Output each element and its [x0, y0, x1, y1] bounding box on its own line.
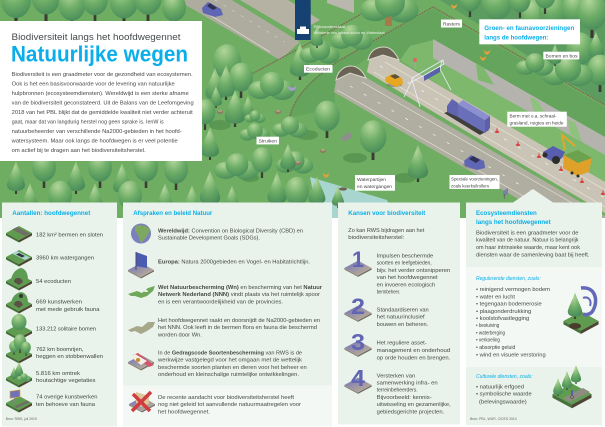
list: culturele diensten: • natuurlijk erfgoed: [476, 385, 524, 391]
label: Speciale voorzieningen: zoals keerkuilrollers: [451, 183, 490, 188]
intro text: Ook is het een basisvoorwaarde voor de levering van natuurlijke: [12, 82, 175, 88]
text: Wet Natuurbescherming: en is een verantwoordelijkheid van de provincies.: [158, 299, 283, 305]
item 4: Bijvoorbeeld: kennis-: [377, 395, 432, 401]
list: regulerende diensten: • waterberging: [476, 330, 505, 336]
list: regulerende diensten: • tegengaan bodemerosie: [476, 302, 542, 308]
label: Speciale voorzieningen: Speciale voorzieningen,: [451, 176, 498, 182]
icon: gedragscode: [128, 353, 154, 370]
text: [36, 347, 103, 360]
label: Speciale voorzieningen: [450, 175, 500, 189]
intro text: natuurbeheerder van verschillende Na2000-gebieden in het hoofd-: [12, 129, 182, 135]
item 3: management en onderhoud: [377, 348, 450, 354]
grass verge with wall: [400, 39, 605, 190]
intro text: van de biodiversiteit geconstateerd. Uit de Balans van de Leefomgeving: [12, 100, 194, 106]
logo: Rijkswaterstaat: [295, 0, 385, 40]
intro: [476, 231, 590, 258]
text: houtachtige vegetaties: [36, 378, 96, 384]
heading: langs het hoofdwegennet: [476, 219, 551, 226]
icon: number 2: [344, 294, 372, 322]
list: culturele diensten: • symbolische waarde: [476, 392, 532, 398]
list: culturele diensten: [476, 385, 532, 405]
callout: Groen- en faunavoorzieningen: [479, 19, 580, 44]
item 2: bouwen en beheren.: [377, 322, 428, 328]
intro text: 2018 van het PBL blijkt dat de gemiddelde kwaliteit niet verder achteruit: [12, 110, 193, 116]
icon: number 1: [344, 247, 372, 277]
label: Waterpartijen: en watergangen: [357, 184, 393, 189]
intro: [348, 228, 425, 241]
text: Gedragscode: [158, 350, 307, 378]
label: Rasters: [441, 20, 462, 28]
list: culturele diensten: (belevingswaarde): [479, 399, 527, 405]
label: Waterpartijen: Waterpartijen: [357, 177, 387, 182]
heading: Aantallen: hoofdwegennet: [12, 210, 90, 217]
water: [310, 177, 395, 218]
source: Bron: RWS, juli 2019: [6, 417, 37, 421]
label: Ecoducten: [304, 65, 332, 73]
item 3: Het reguliere asset-: [377, 341, 427, 347]
road top left: [177, 0, 320, 60]
intro: Biodiversiteit is een graadmeter voor de: [476, 231, 579, 237]
item 1: [377, 254, 450, 296]
logo: Rijkswaterstaat: Rijkswaterstaat: [314, 25, 346, 29]
text: hoofdwegennet raakt: Het hoofdwegennet raakt en doorsnijdt de Na2000-gebieden en: [158, 318, 320, 324]
icon: red cross: [129, 392, 155, 412]
item 1: Impulsen beschermde: [377, 254, 433, 260]
tree shadows: [209, 120, 416, 183]
icon: number 2: 2: [351, 294, 365, 319]
icon: bermen en sloten: [6, 226, 32, 242]
item 2: Standaardiseren van: [377, 307, 429, 313]
subheading: Culturele diensten: Culturele diensten, zoals:: [476, 374, 533, 380]
icon: number 4: 4: [351, 365, 365, 391]
item 4: Versterken van: [377, 373, 415, 379]
road 2 (upper): [367, 47, 605, 213]
text: 3960 km watergangen: [36, 256, 94, 262]
item 1: bijv. het verder ontsnipperen: [377, 268, 450, 274]
text: Gedragscode: werkwijze vastgelegd voor het omgaan met de wettelijk: [158, 358, 302, 364]
label: Berm met: grasland, ruigtes en heide: [510, 120, 564, 126]
heading: Afspraken en beleid Natuur: [133, 210, 213, 217]
text: 133.212 solitaire bomen: [36, 326, 96, 332]
icon: number 3: [344, 329, 372, 357]
roller sign: [503, 188, 508, 199]
icon: overige kunstwerken: [6, 390, 32, 412]
intro: biodiversiteitsherstel:: [348, 235, 404, 241]
intro text: Biodiversiteit is een graadmeter voor de gezondheid van ecosystemen.: [12, 72, 193, 78]
ecoduct green: [250, 3, 605, 190]
list: regulerende diensten: • wind en visuele verstoring: [476, 352, 546, 358]
list: regulerende diensten: • verkoeling: [476, 338, 500, 344]
text: Wereldwijd: Wereldwijd: Convention on Biological Diversity (CBD) en: [158, 228, 303, 234]
text: 182 km² bermen en sloten: [36, 232, 103, 238]
trees centre: [194, 0, 428, 214]
intro: kwaliteit van de natuur. Natuur is belangrijk: [476, 238, 579, 244]
text: recente aandacht: het hoofdwegennet.: [158, 409, 210, 415]
icon: tree with cycle: [563, 288, 599, 334]
trees below title card: [7, 153, 201, 218]
panel: Afspraken en beleid: [123, 202, 332, 426]
trees top right: [460, 0, 605, 92]
label: Bomen en bos: Bomen en bos: [546, 54, 578, 58]
list: regulerende diensten: • koolstofvastlegging: [476, 316, 529, 322]
text: hoofdwegennet raakt: het NNN. Ook leeft in de bermen flora en fauna die beschermd: [158, 325, 317, 331]
stumps: [217, 110, 326, 165]
text: 54 ecoducten: [36, 279, 71, 285]
text: hoofdwegennet raakt: [158, 318, 320, 338]
item 4: uitwisseling en gezamenlijke,: [377, 402, 451, 408]
text: hoofdwegennet raakt: worden door Wn.: [158, 332, 202, 338]
intro: om haar intrinsieke waarde, maar kent ook: [476, 245, 580, 251]
heading: Ecosysteemdiensten: [476, 210, 537, 217]
label: Struiken: Struiken: [258, 138, 278, 144]
item 1: bermbeheer.: [377, 290, 400, 296]
list: regulerende diensten: • bestuiving: [476, 323, 499, 329]
road 1 (lower): [334, 66, 605, 219]
item 3: [377, 341, 450, 361]
label: Struiken: [256, 137, 279, 144]
item 4: gebiedsgerichte projecten.: [377, 409, 444, 415]
sign road: [413, 58, 417, 69]
panel: Aantallen: [2, 202, 117, 426]
text: heggen en stobbenwallen: [36, 354, 103, 360]
text: Wet Natuurbescherming: Wet Natuurbescherming (Wn) en bescherming van het Natuur: [158, 285, 322, 291]
list: regulerende diensten: [476, 287, 550, 358]
intro text: watersysteem. Maar ook langs de hoofdwegen is er veel potentie: [11, 138, 178, 144]
yellow car: [385, 74, 403, 87]
icon: NL map green: [128, 286, 155, 298]
item 2: [377, 307, 429, 328]
white lower background: [0, 218, 605, 427]
text: 669 kunstwerken: [36, 300, 82, 306]
intro: diensten waar de samenleving baat bij heeft.: [476, 252, 590, 258]
item 4: [377, 373, 451, 415]
icon: ecoducten: [6, 268, 32, 290]
callout: Groen- en faunavoorzieningen: Groen- en faunavoorzieningen: [484, 25, 574, 32]
item 1: soorten en leefgebieden,: [377, 261, 432, 267]
top car: [202, 2, 223, 17]
item 1: van het hoofdwegennet: [377, 275, 438, 281]
text: [36, 371, 96, 384]
text: Gedragscode: In de Gedragscode Soortenbescherming van RWS is de: [158, 350, 302, 356]
icon: trees with cyclist: [552, 365, 592, 408]
traffic cones: [495, 127, 605, 195]
text: Europa: Europa: Natura 2000gebieden en Vogel- en Habitatrichtlijn.: [158, 260, 310, 266]
forest background top right: [440, 0, 605, 105]
icon: boomrijen: [6, 334, 32, 364]
panel: Kansen voor biodiversiteit: [338, 202, 460, 424]
heading: [476, 210, 551, 226]
item 2: het natuurinclusief: [377, 315, 425, 321]
gantry: [404, 60, 451, 107]
icon: houtachtige vegetaties: [6, 362, 32, 388]
text: Gedragscode: onderhoud en kleinschalige ruimtelijke ontwikkelingen.: [158, 372, 299, 378]
source: Bron: PBL, WUR, CICES 2014: [470, 417, 517, 421]
list: regulerende diensten: • absorptie geluid: [476, 345, 515, 351]
intro text: om actief bij te dragen aan het biodiversiteitsherstel.: [12, 148, 146, 154]
text: [36, 394, 98, 408]
list: regulerende diensten: • plaagonderdrukking: [476, 309, 531, 315]
text: 762 km boomrijen,: [36, 347, 84, 353]
label: Berm met: [507, 112, 567, 127]
tractor and trailer: [542, 135, 592, 178]
label: Berm met: Berm met o.a. schraal-: [510, 114, 557, 118]
text: [36, 300, 100, 313]
title card: [0, 21, 202, 161]
label: Bomen en bos: [543, 52, 579, 59]
panel: Ecosysteemdiensten: [466, 189, 602, 425]
intro text: gaat, maar dat van langdurig herstel nog geen sprake is. IenW is: [12, 120, 164, 126]
trees top left: [1, 0, 186, 28]
icon: number 3: 3: [351, 329, 365, 355]
text: ten behoeve van fauna: [36, 402, 96, 408]
text: met mede gebruik fauna: [36, 307, 100, 313]
text: 74 overige kunstwerken: [36, 394, 98, 400]
heading: Kansen voor biodiversiteit: [348, 210, 425, 217]
main title: Natuurlijke wegen: [11, 42, 188, 66]
text: Wet Natuurbescherming: [158, 285, 322, 305]
truck: [444, 99, 490, 135]
text: recente aandacht: De recente aandacht voor biodiversiteitsherstel heeft: [158, 395, 295, 401]
intro text: hulpbronnen (ecosysteemdiensten). Wereldwijd is een sterke afname: [12, 91, 189, 97]
item 4: samenwerking infra- en: [377, 381, 438, 387]
illustration: road landscape: [0, 0, 605, 219]
icon: NL map tan: [128, 322, 155, 334]
label: Rasters: Rasters: [443, 21, 461, 26]
icon: Europa flag: [128, 252, 154, 278]
icon: globe: [131, 224, 151, 244]
item 4: terreinbeheerders.: [377, 388, 418, 394]
intro text: [11, 72, 194, 154]
animals: [288, 4, 490, 178]
text: 5.816 km omtrek: [36, 371, 80, 377]
intro: Zo kan RWS bijdragen aan het: [348, 228, 425, 234]
icon: watergangen: [6, 250, 32, 266]
list: regulerende diensten: • reinigend vermogen bodem: [476, 287, 550, 293]
title kicker: Biodiversiteit langs het hoofdwegennet: [12, 32, 181, 42]
text: Wet Natuurbescherming: Netwerk Nederland (NNN) vindt plaats via het ruimtelijk spoor: [158, 292, 320, 298]
item 3: op orde houden en brengen.: [377, 355, 450, 361]
icon: number 1: 1: [352, 247, 364, 272]
icon: number 4: [344, 365, 372, 394]
blue car: [463, 155, 485, 170]
item 1: en invoeren ecologisch: [377, 282, 435, 288]
callout: Groen- en faunavoorzieningen: langs de hoofdwegen:: [484, 34, 548, 41]
icon: kunstwerken: [6, 292, 32, 314]
text: Wereldwijd: Sustainable Development Goals (SDGs).: [158, 235, 260, 241]
subheading: Regulerende diensten: Regulerende diensten, zoals:: [476, 276, 541, 282]
logo: Rijkswaterstaat: Ministerie van Infrastructuur en Waterstaat: [314, 31, 385, 35]
label: Ecoducten: Ecoducten: [306, 67, 331, 72]
label: Waterpartijen: [355, 175, 395, 191]
list: regulerende diensten: • water en lucht: [476, 294, 516, 300]
text: recente aandacht: [158, 395, 301, 415]
text: Wereldwijd: [158, 228, 303, 241]
wall top: [327, 0, 354, 13]
text: Gedragscode: beschermde soorten planten en dieren voor het beheer en: [158, 365, 307, 371]
text: recente aandacht: nog niet geleid tot aanvullende natuurmaatregelen voor: [158, 402, 301, 408]
tunnel portals: [336, 47, 399, 80]
icon: solitaire bomen: [6, 314, 32, 340]
